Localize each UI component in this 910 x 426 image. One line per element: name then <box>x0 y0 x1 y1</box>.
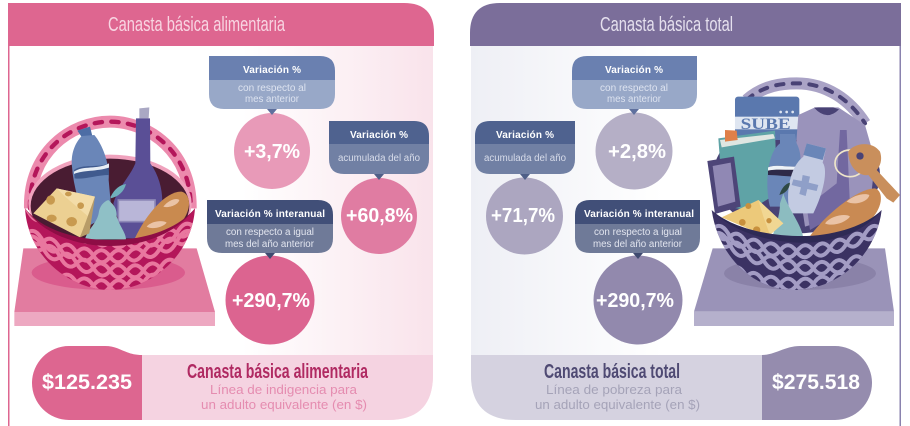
header: total: Canasta básica total <box>600 14 733 36</box>
callout: variación mensual: con respecto al <box>600 83 668 94</box>
callout: variación interanual: Variación % interanual <box>584 209 694 220</box>
price bar: alimentaria: $125.235 <box>42 370 132 394</box>
callout: variación mensual: +3,7% <box>244 141 300 163</box>
callout: variación acumulada: acumulada del año <box>338 153 420 164</box>
illustration: basket of goods: SUBE <box>741 116 791 133</box>
header: total <box>470 3 901 46</box>
callout: variación mensual <box>572 56 697 190</box>
header: alimentaria: Canasta básica alimentaria <box>108 14 286 36</box>
callout: variación acumulada: +71,7% <box>491 205 555 227</box>
callout: variación interanual <box>207 200 333 344</box>
callout: variación interanual: mes del año anterior <box>225 239 315 250</box>
callout: variación acumulada: acumulada del año <box>484 153 566 164</box>
price bar: alimentaria: Canasta básica alimentaria <box>187 361 369 383</box>
callout: variación interanual <box>575 200 700 344</box>
price bar: total: Canasta básica total <box>544 361 680 383</box>
price bar: total: un adulto equivalente (en $) <box>535 397 700 412</box>
callout: variación acumulada: Variación % <box>350 130 408 141</box>
illustration: basket of food <box>10 107 227 326</box>
price bar: alimentaria: Línea de indigencia para <box>210 382 358 397</box>
callout: variación acumulada <box>329 121 429 254</box>
callout: variación interanual: con respecto a igual <box>226 227 314 238</box>
header: alimentaria <box>8 3 434 46</box>
callout: variación interanual: +290,7% <box>232 290 310 312</box>
price bar: total: $275.518 <box>772 370 860 394</box>
callout: variación mensual: +2,8% <box>608 141 666 163</box>
price bar: alimentaria: un adulto equivalente (en $) <box>201 397 367 412</box>
callout: variación acumulada: Variación % <box>496 130 554 141</box>
callout: variación mensual: con respecto al <box>238 83 306 94</box>
callout: variación mensual: mes anterior <box>607 94 662 105</box>
callout: variación mensual: Variación % <box>605 65 663 76</box>
callout: variación mensual: Variación % <box>243 65 301 76</box>
callout: variación interanual: Variación % interanual <box>215 209 325 220</box>
callout: variación acumulada <box>475 121 575 254</box>
illustration: basket of goods <box>694 83 910 326</box>
panel: canasta básica total <box>470 3 910 426</box>
callout: variación interanual: mes del año anterior <box>593 239 683 250</box>
price bar: alimentaria <box>32 346 433 420</box>
price bar: total <box>471 346 872 420</box>
callout: variación acumulada: +60,8% <box>346 205 413 227</box>
callout: variación mensual <box>209 56 335 189</box>
panel: canasta básica alimentaria <box>8 3 434 426</box>
callout: variación mensual: mes anterior <box>245 94 300 105</box>
price bar: total: Línea de pobreza para <box>546 382 683 397</box>
callout: variación interanual: +290,7% <box>596 290 674 312</box>
callout: variación interanual: con respecto a igual <box>594 227 682 238</box>
